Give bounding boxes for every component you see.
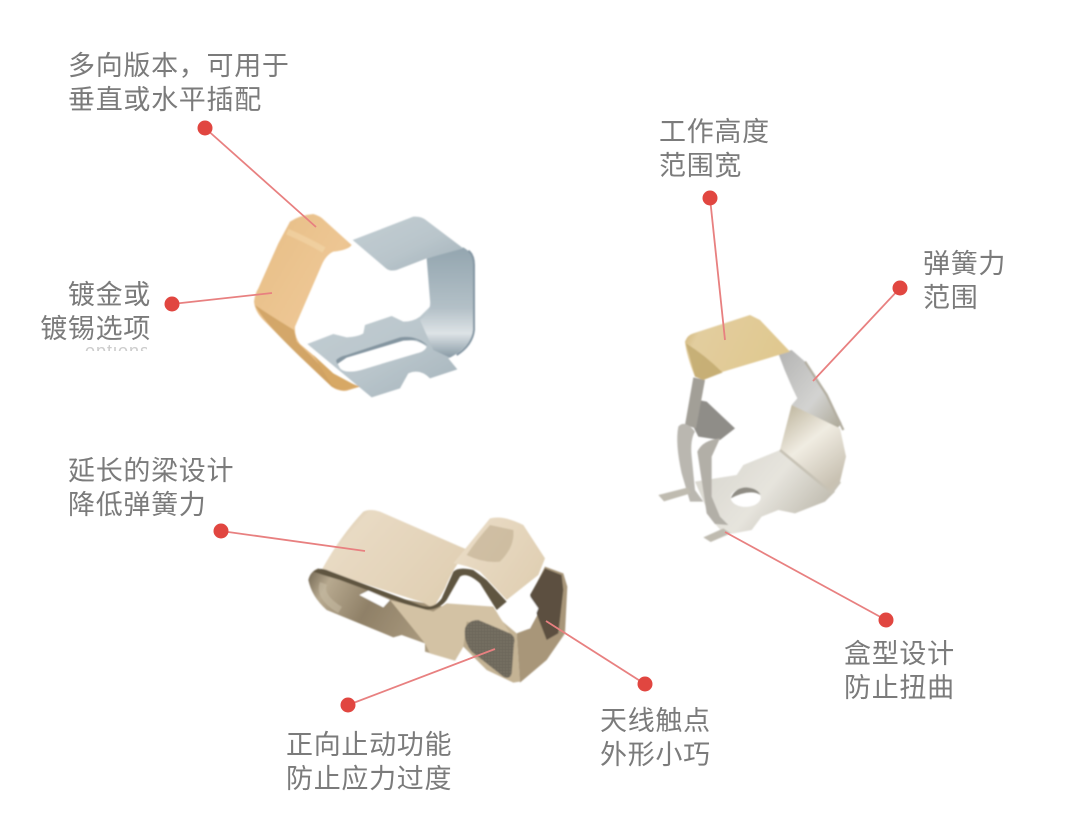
callout leader: antenna contact bbox=[546, 621, 652, 692]
label: extended beam: 降低弹簧力 bbox=[68, 490, 206, 520]
label: antenna contact: 外形小巧 bbox=[600, 740, 711, 770]
callout leader: extended beam bbox=[214, 524, 365, 551]
label: plating options bbox=[40, 280, 151, 344]
label: working height range bbox=[659, 117, 770, 181]
label: positive stop bbox=[286, 730, 452, 794]
label: multi-direction version: 多向版本，可用于 bbox=[68, 51, 290, 81]
callout leader: box design bbox=[725, 532, 894, 628]
image: brass top clip with box base bbox=[658, 315, 846, 542]
label: antenna contact: 天线触点 bbox=[600, 706, 711, 736]
label: working height range: 工作高度 bbox=[659, 117, 770, 147]
label: extended beam: 延长的梁设计 bbox=[68, 456, 234, 486]
label: antenna contact bbox=[600, 706, 711, 770]
label: working height range: 范围宽 bbox=[659, 151, 742, 181]
label: spring force range: 范围 bbox=[923, 283, 978, 313]
label: positive stop: 防止应力过度 bbox=[286, 764, 452, 794]
callout leader: positive stop bbox=[340, 649, 495, 712]
callout leader: spring force range bbox=[813, 280, 908, 381]
label: plating options: 镀锡选项 bbox=[40, 314, 151, 344]
label: box design bbox=[844, 639, 955, 703]
label: spring force range bbox=[923, 249, 1006, 313]
image: contact clip with extended beam bbox=[308, 510, 567, 683]
callout leader: working height bbox=[702, 190, 725, 340]
callout leader: multi-direction version bbox=[198, 120, 316, 227]
callout leader: plating options bbox=[164, 293, 272, 312]
label: extended beam bbox=[68, 456, 234, 520]
label: box design: 盒型设计 bbox=[844, 639, 955, 669]
label: plating options: 镀金或 bbox=[68, 280, 151, 310]
label: spring force range: 弹簧力 bbox=[923, 249, 1006, 279]
label: multi-direction version bbox=[68, 51, 290, 115]
image: gold and tin plated clip bbox=[254, 214, 474, 397]
label: positive stop: 正向止动功能 bbox=[286, 730, 452, 760]
label: box design: 防止扭曲 bbox=[844, 673, 955, 703]
label: multi-direction version: 垂直或水平插配 bbox=[68, 85, 262, 115]
